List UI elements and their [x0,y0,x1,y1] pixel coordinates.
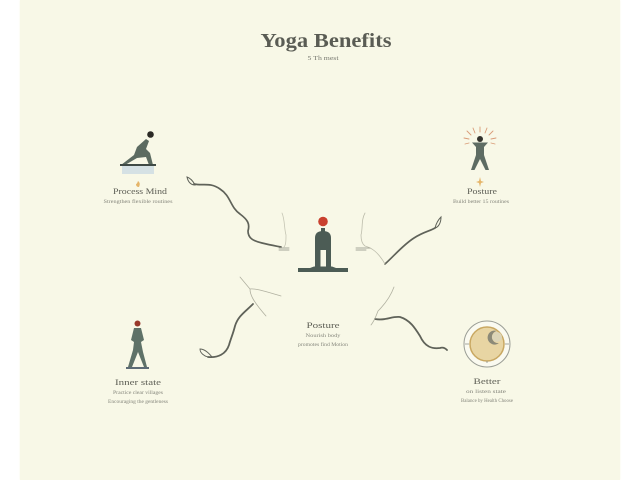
description: Practice clear villages [113,390,163,396]
icon: radiating lines [464,127,496,144]
panel: bottom-right benefit [461,321,513,404]
arrow: bottom-right branch [371,287,447,350]
panel: top-left benefit [104,131,172,205]
title: Yoga Benefits [260,30,392,52]
icon: round dial [464,321,510,367]
icon: standing figure [471,136,489,170]
arrow: bottom-left branch [200,277,281,357]
heading: Posture [467,187,498,196]
heading: Inner state [115,377,161,387]
panel: center-bottom text [298,320,348,348]
icon: small spark [476,177,484,187]
description: Build better 15 routines [453,199,509,205]
panel: bottom-left benefit [108,320,168,405]
heading: Posture [306,320,340,330]
icon: yoga lunge figure [120,131,156,174]
panel: top-right benefit [453,127,509,205]
description line two: promotes find Motion [298,341,348,348]
arrow: top-right branch [356,213,441,264]
icon: small flame [136,181,140,187]
description: Strengthen flexible routines [104,198,172,205]
center figure: seated meditation [298,217,348,272]
subtitle: 5 Th mest [308,56,339,62]
description: Nourish body [306,333,341,339]
description: on listen state [466,389,507,395]
description line two: Encouraging the gentleness [108,399,168,405]
heading: Better [474,376,501,386]
description line two: Balance by Health Choose [461,398,513,404]
arrow: top-left branch [187,177,289,250]
heading: Process Mind [113,187,167,196]
icon: walking figure [126,320,149,369]
